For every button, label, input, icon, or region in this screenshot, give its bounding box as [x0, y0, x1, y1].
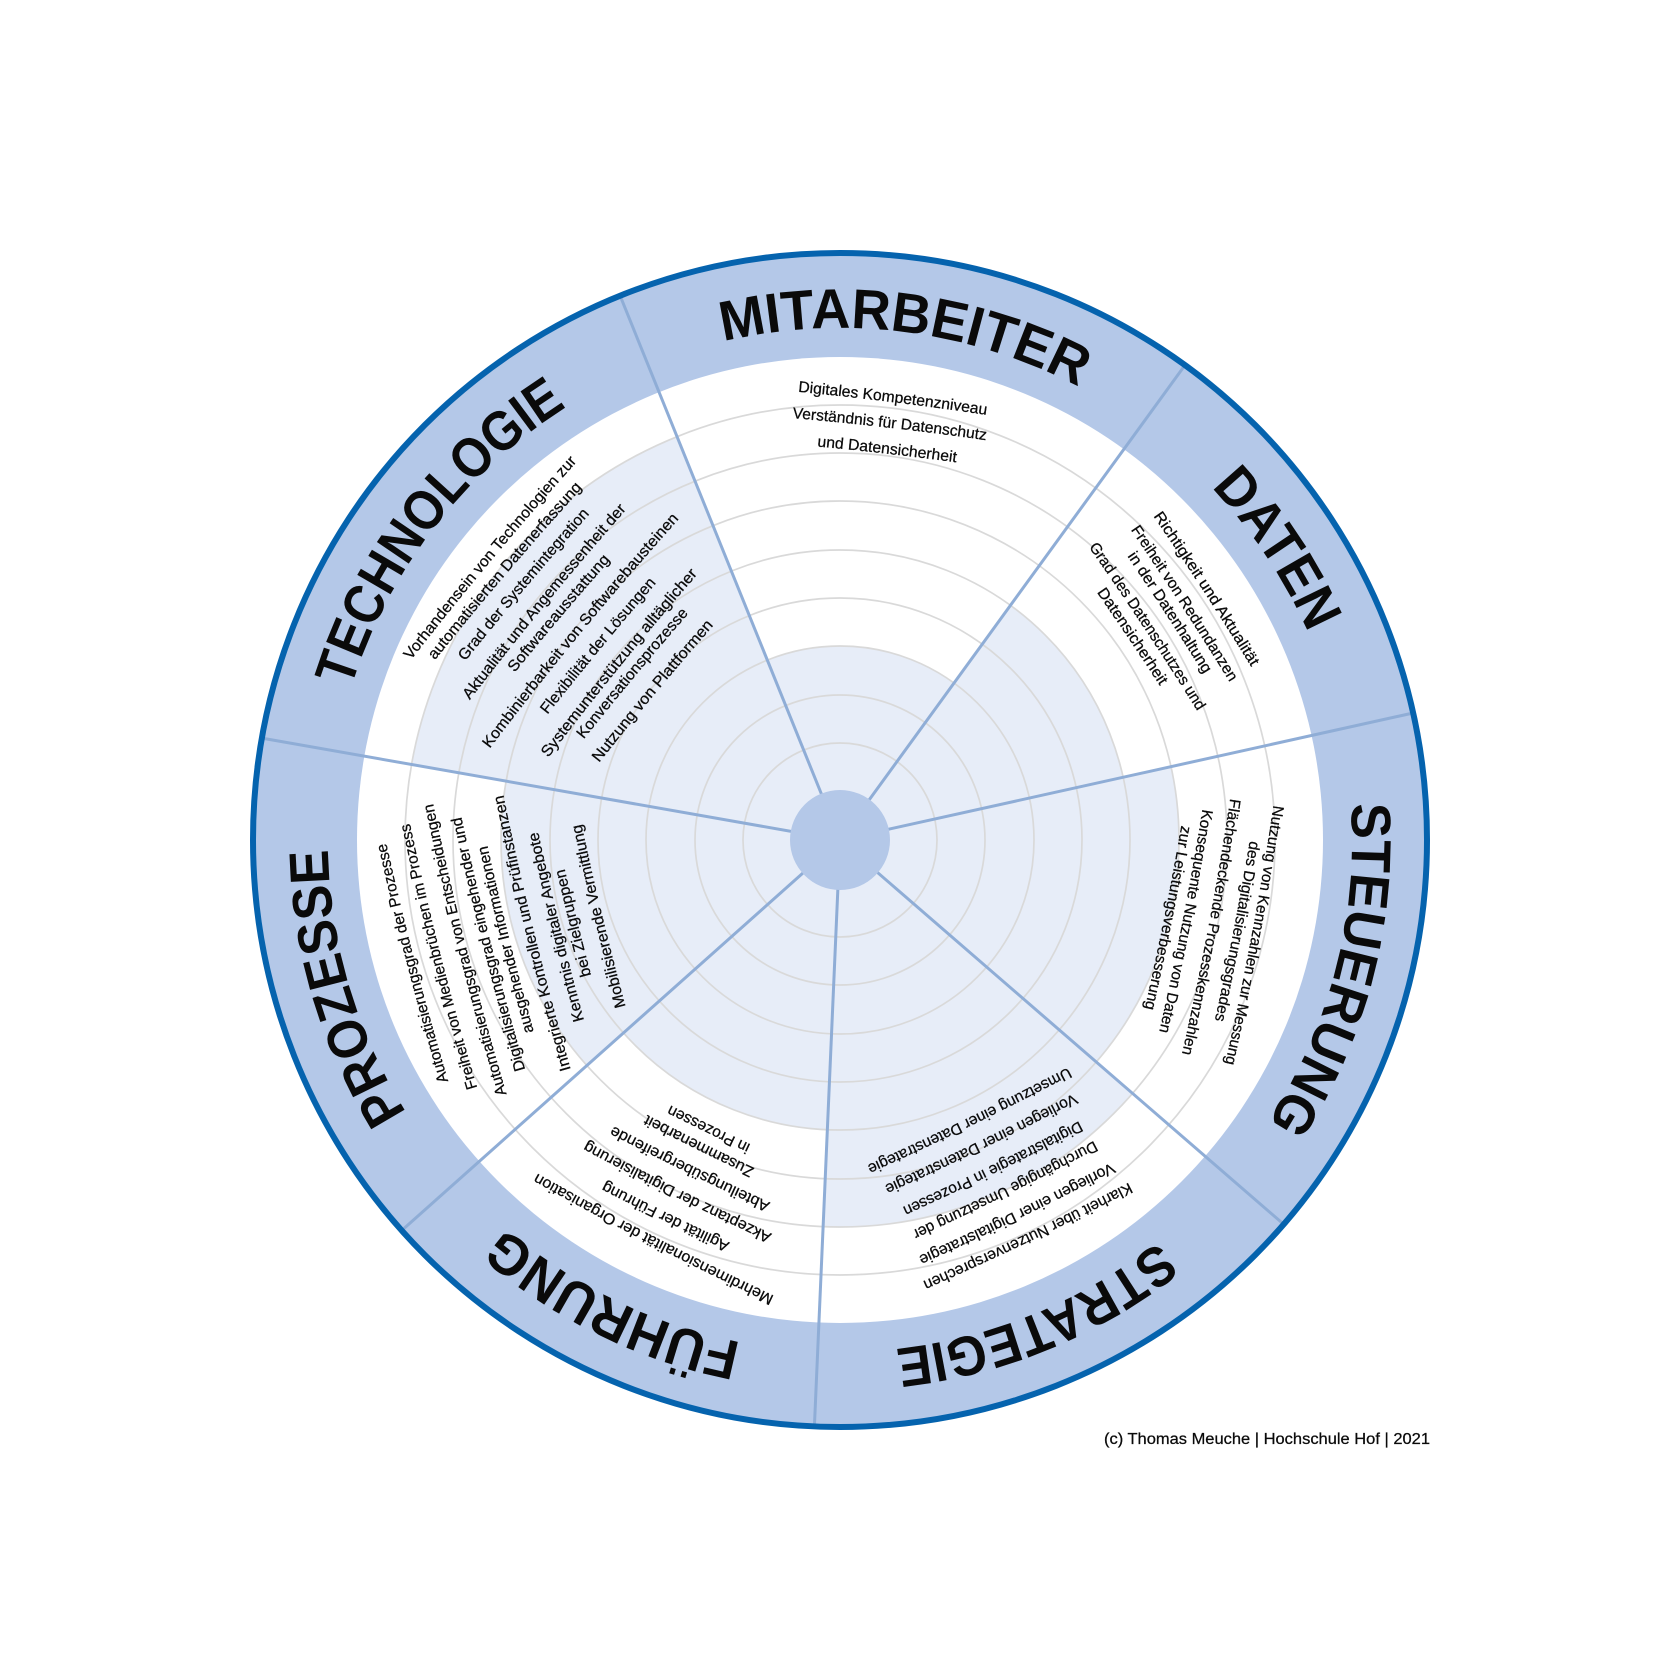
criteria text: Mitarbeiter: Digitales Kompetenzniveau: [799, 381, 987, 415]
sector divider spokes: [262, 296, 1413, 1426]
heading: Technologie: TECHNOLOGIE: [275, 344, 586, 708]
criteria text: Prozesse: Digitalisierungsgrad eingehender und: [450, 818, 525, 1072]
criteria text: Daten: Richtigkeit und Aktualität: [1154, 510, 1259, 667]
criteria text: Daten: Grad des Datenschutzes und: [1090, 543, 1207, 710]
criteria text: Prozesse: bei Zielgruppen: [557, 870, 591, 978]
criteria text: Steuerung: [1142, 800, 1284, 1065]
shaded maturity sectors: [412, 437, 1179, 1227]
heading: Prozesse: PROZESSE: [289, 851, 404, 1130]
panel: Prozesse: [289, 796, 626, 1130]
criteria text: Prozesse: Kenntnis digitaler Angebote: [530, 832, 584, 1022]
criteria text: Steuerung: Flächendeckende Prozesskennzahlen: [1182, 800, 1241, 1054]
criteria text: Prozesse: Automatisierungsgrad von Entscheidungen: [425, 804, 507, 1094]
criteria text: Technologie: Softwareausstattung: [504, 551, 614, 676]
panel: Strategie: [868, 1068, 1175, 1387]
criteria text: Führung: Abteilungsübergreifende: [611, 1127, 771, 1211]
criteria text: Technologie: Flexibilität der Lösungen: [536, 574, 660, 717]
criteria text: Technologie: Grad der Systemintegration: [454, 504, 593, 664]
criteria text: Strategie: Digitalstrategie in Prozessen: [903, 1121, 1084, 1214]
panel: Mitarbeiter: [720, 289, 1090, 462]
criteria text: Steuerung: des Digitalisierungsgrades: [1215, 842, 1260, 1022]
panel: Technologie: [314, 376, 713, 762]
criteria text: Steuerung: Nutzung von Kennzahlen zur Messung: [1222, 806, 1284, 1065]
inner white disc: [357, 357, 1323, 1323]
outer blue ring: [253, 253, 1427, 1427]
criteria text: Führung: in Prozessen: [668, 1106, 750, 1154]
criteria text: Daten: [1090, 510, 1259, 710]
criteria text: Daten: Datensicherheit: [1097, 587, 1168, 686]
criteria text: Prozesse: Integrierte Kontrollen und Prüfinstanzen: [496, 796, 570, 1072]
criteria text: Strategie: Vorliegen einer Digitalstrategie: [920, 1164, 1116, 1263]
heading: Steuerung: STEUERUNG: [1274, 804, 1391, 1134]
criteria text: Technologie: Konversationsprozesse: [573, 604, 692, 742]
heading: Strategie: STRATEGIE: [897, 1246, 1175, 1387]
criteria text: Prozesse: [378, 796, 626, 1094]
criteria text: Technologie: Kombinierbarkeit von Softwarebausteinen: [477, 508, 683, 752]
copyright note: (c) Thomas Meuche | Hochschule Hof | 2021: [1104, 1431, 1430, 1448]
panel: Daten: [1090, 464, 1342, 710]
panel: Steuerung: [1142, 800, 1391, 1134]
criteria text: Führung: Mehrdimensionalität der Organisation: [534, 1174, 774, 1306]
criteria text: Prozesse: Freiheit von Medienbrüchen im Prozess: [402, 824, 477, 1090]
criteria text: Strategie: Durchgängige Umsetzung der: [914, 1141, 1098, 1238]
criteria text: Mitarbeiter: und Datensicherheit: [818, 437, 958, 462]
centre hub: [790, 790, 890, 890]
criteria text: Strategie: Umsetzung einer Datenstrategie: [868, 1068, 1072, 1172]
criteria text: Führung: Akzeptanz der Digitalisierung: [584, 1140, 772, 1242]
criteria text: Führung: [534, 1106, 774, 1306]
criteria text: Mitarbeiter: Verständnis für Datenschutz: [793, 407, 986, 440]
criteria text: Technologie: Vorhandensein von Technologien zur: [399, 451, 580, 663]
criteria text: Technologie: automatisierten Datenerfassung: [423, 478, 586, 663]
criteria text: Prozesse: Mobilisierende Vermittlung: [573, 824, 626, 1008]
criteria text: Steuerung: Konsequente Nutzung von Daten: [1159, 810, 1213, 1032]
criteria text: Daten: in der Datenhaltung: [1128, 550, 1210, 674]
criteria text: Strategie: Vorliegen einer Datenstrategie: [886, 1095, 1079, 1192]
criteria text: Strategie: [868, 1068, 1133, 1288]
panel: Führung: [488, 1106, 774, 1380]
criteria text: Mitarbeiter: [793, 381, 987, 462]
criteria text: Prozesse: Automatisierungsgrad der Prozesse: [378, 844, 448, 1082]
criteria text: Technologie: [402, 456, 713, 762]
criteria text: Steuerung: zur Leistungsverbesserung: [1142, 826, 1190, 1010]
outer band fill: [253, 253, 1427, 1427]
concentric scale rings: [405, 405, 1275, 1275]
criteria text: Führung: Agilität der Führung: [602, 1180, 730, 1251]
heading: Daten: DATEN: [1214, 464, 1342, 630]
criteria text: Technologie: Aktualität und Angemessenheit der: [458, 499, 630, 703]
criteria text: Technologie: Nutzung von Plattformen: [588, 616, 717, 766]
criteria text: Technologie: Systemunterstützung alltäglicher: [536, 564, 701, 761]
criteria text: Strategie: Klarheit über Nutzenversprechen: [923, 1182, 1133, 1288]
heading: Führung: FÜHRUNG: [488, 1234, 738, 1380]
criteria text: Daten: Freiheit von Redundanzen: [1131, 524, 1236, 682]
heading: Mitarbeiter: MITARBEITER: [720, 289, 1090, 386]
criteria text: Führung: Zusammenarbeit: [644, 1114, 754, 1178]
criteria text: Prozesse: ausgehender Informationen: [480, 846, 534, 1032]
